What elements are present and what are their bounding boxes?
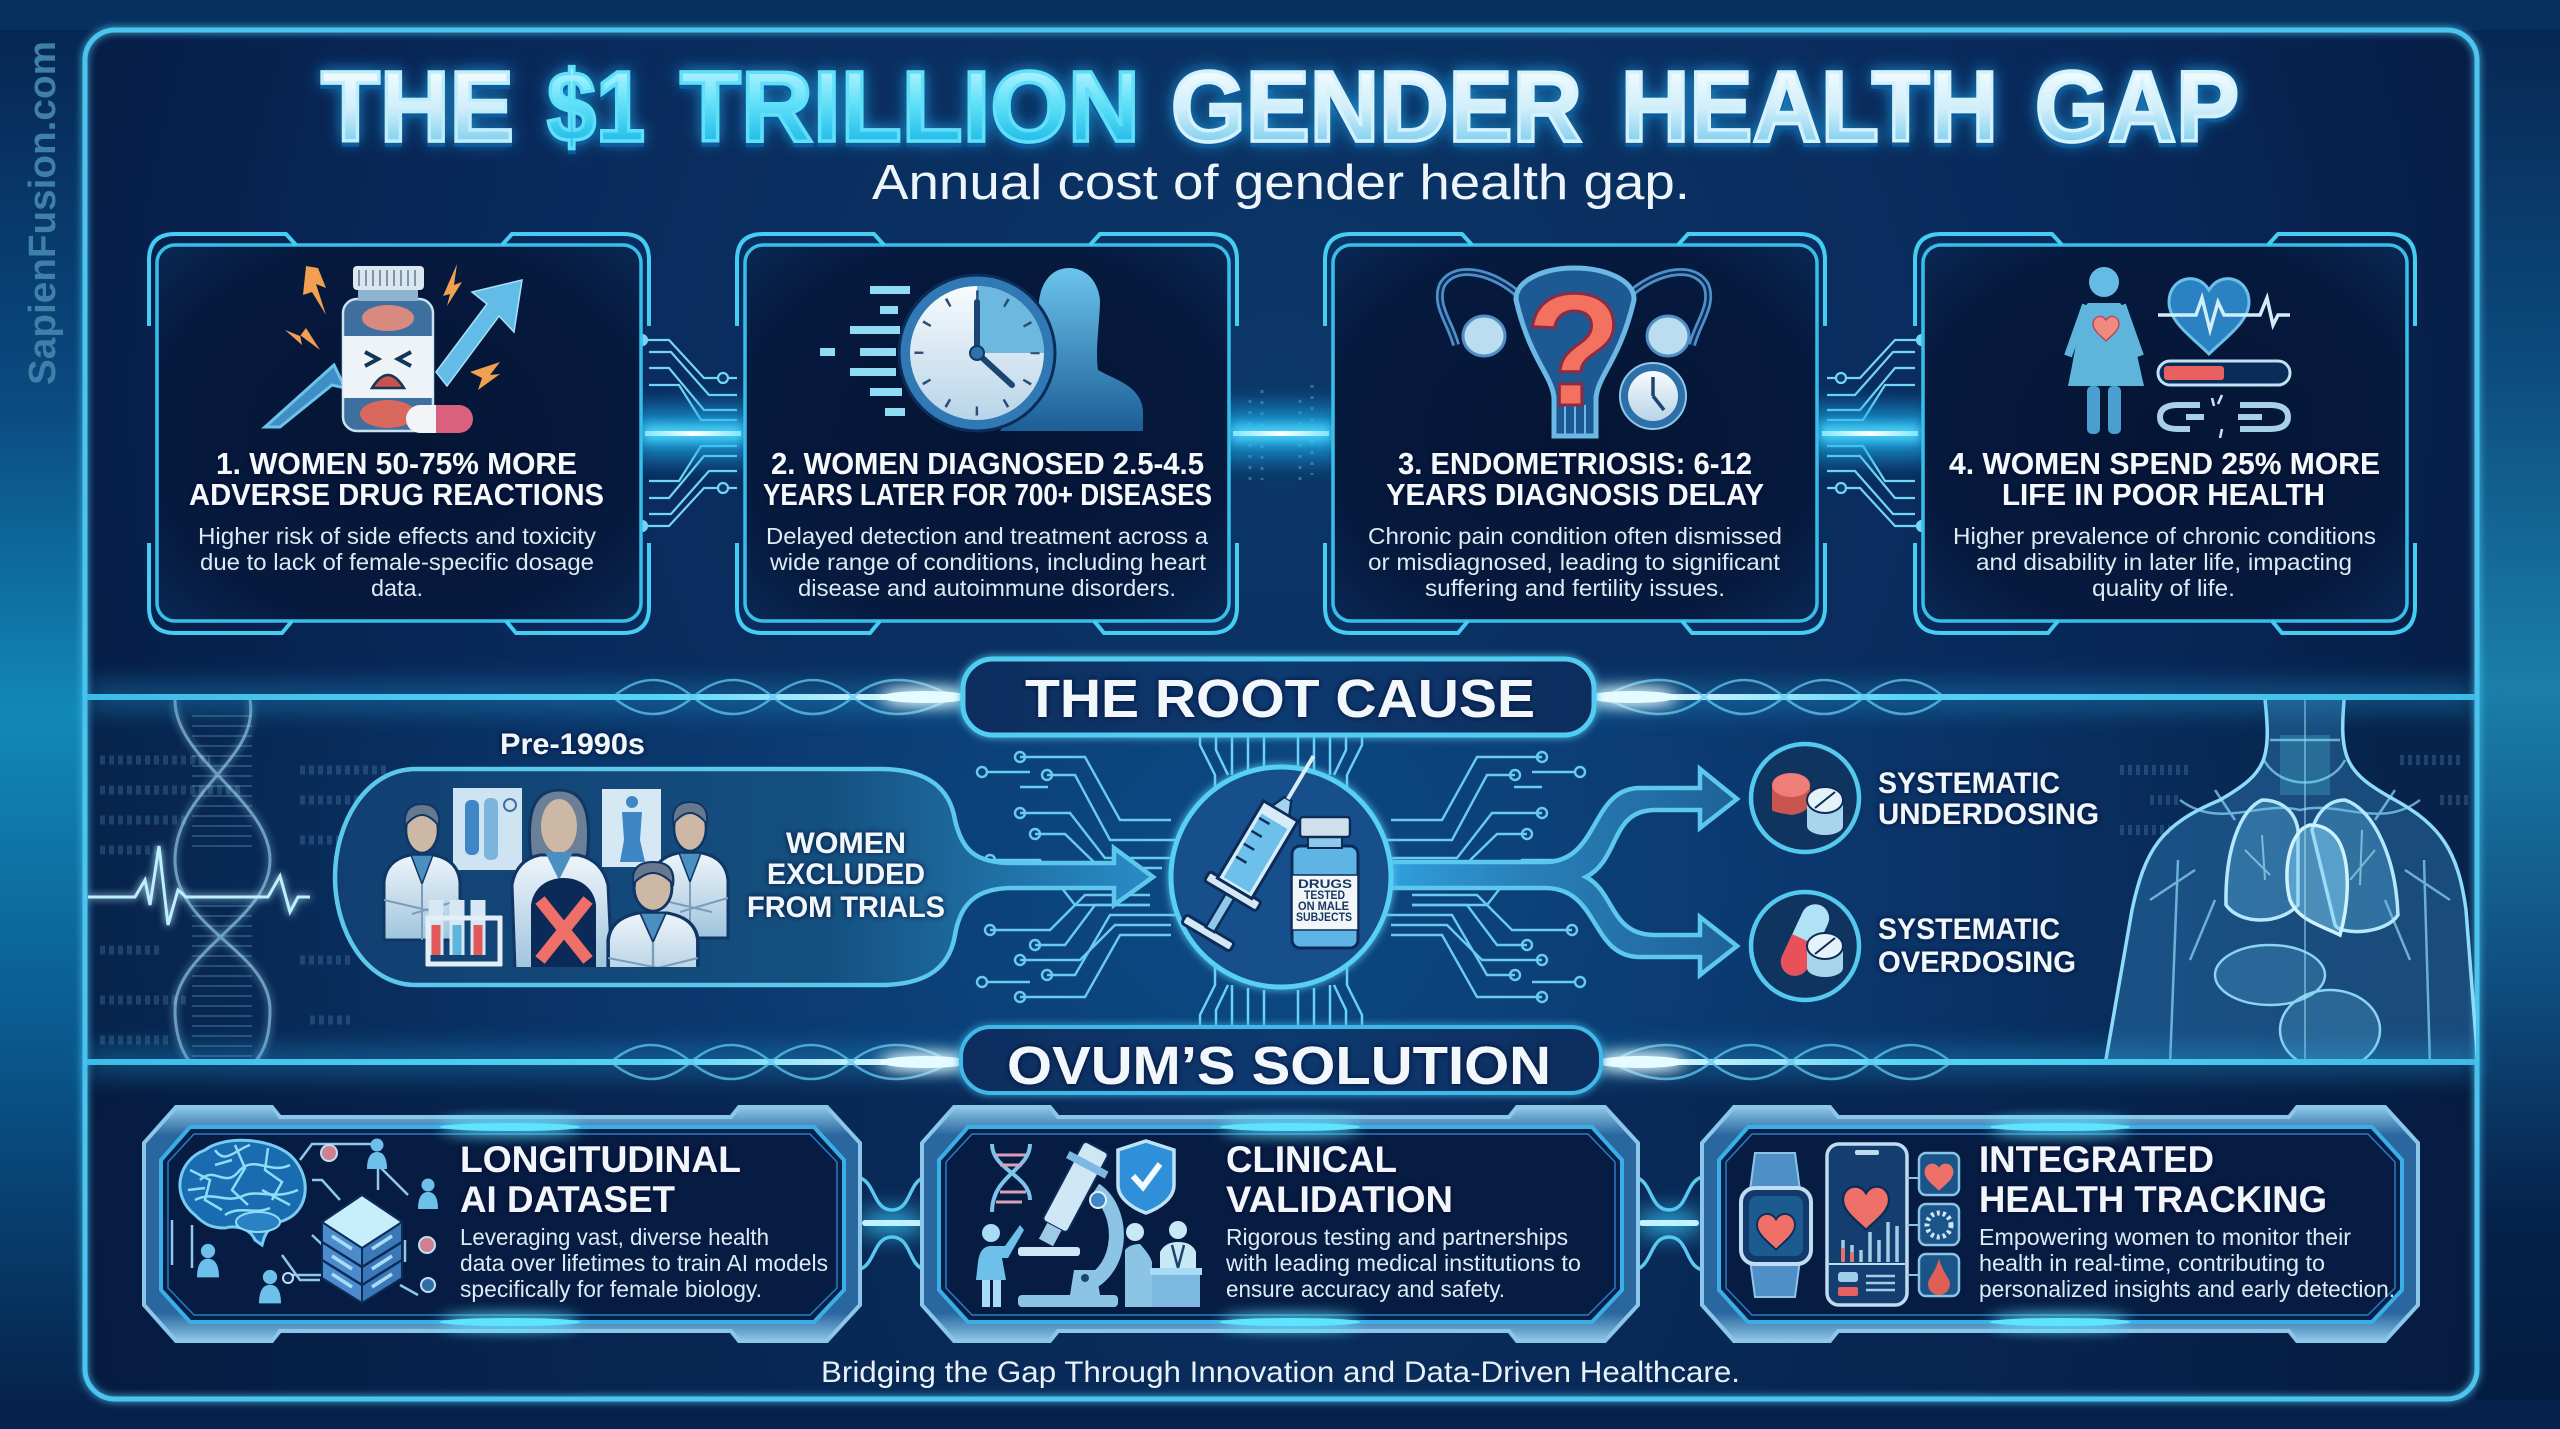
solution 2 description: ensure accuracy and safety.	[1226, 1276, 1505, 1302]
circuit traces around center	[977, 735, 1585, 1025]
card 3 description: Chronic pain condition often dismissed	[1368, 523, 1782, 549]
solution 3 description: Empowering women to monitor their	[1979, 1224, 2351, 1250]
divider: solution line	[87, 1045, 2475, 1079]
card 4 heading: LIFE IN POOR HEALTH	[2002, 477, 2325, 512]
solution 1 description: data over lifetimes to train AI models	[460, 1250, 828, 1276]
icon: tablets	[1751, 744, 1859, 852]
icon: uterus with question mark and clock	[1440, 260, 1708, 439]
panel: card 4 poor health	[1915, 234, 2415, 633]
panel: card 2 delayed diagnosis	[737, 234, 1237, 633]
underdosing text: UNDERDOSING	[1878, 798, 2099, 831]
watermark: SapienFusion.com: SapienFusion.com	[22, 41, 64, 385]
connector: cards 3 to 4	[1806, 335, 1934, 531]
icon: brain and data network	[172, 1138, 438, 1303]
icon: drug vial: SUBJECTS	[1296, 910, 1352, 924]
card 4 description	[1953, 523, 2376, 601]
label: pre-1990s: Pre-1990s	[500, 728, 645, 761]
icon: capsule and tablet	[1751, 892, 1859, 1000]
overdosing text	[1878, 913, 2076, 979]
heading: the root cause: THE ROOT CAUSE	[1025, 669, 1535, 729]
panel background: DNA helix and ECG	[88, 700, 410, 1062]
outcome: systematic overdosing	[1751, 892, 2076, 1000]
card 2 description: wide range of conditions, including heart	[769, 549, 1207, 575]
solution 2 heading	[1226, 1139, 1453, 1220]
card 2 heading: YEARS LATER FOR 700+ DISEASES	[763, 477, 1212, 512]
card 4 description: Higher prevalence of chronic conditions	[1953, 523, 2376, 549]
solution 1 heading: AI DATASET	[460, 1179, 675, 1220]
card 4 description: quality of life.	[2092, 575, 2235, 601]
title	[321, 51, 2239, 163]
overdosing text: SYSTEMATIC	[1878, 913, 2060, 946]
card 2 heading: 2. WOMEN DIAGNOSED 2.5-4.5	[771, 446, 1204, 481]
card 4 heading: 4. WOMEN SPEND 25% MORE	[1949, 446, 2380, 481]
solution 1 description: Leveraging vast, diverse health	[460, 1224, 769, 1250]
card 1 description	[198, 523, 597, 601]
panel: women excluded pill with arrow	[335, 769, 1153, 998]
solution 3 description: health in real-time, contributing to	[1979, 1250, 2325, 1276]
card 1 description: data.	[371, 575, 423, 601]
card 3 description: suffering and fertility issues.	[1425, 575, 1725, 601]
connector: cards 1 to 2	[629, 335, 757, 531]
connector: cards 2 to 3	[1217, 385, 1345, 480]
women excluded text: EXCLUDED	[767, 858, 925, 891]
card 3 description	[1368, 523, 1782, 601]
panel: clinical validation	[922, 1107, 1638, 1341]
title: HEALTH	[1621, 51, 1998, 163]
icon: clock and woman silhouette	[820, 268, 1143, 431]
title: $1	[547, 51, 645, 163]
connector: solution cards 2 to 3	[1634, 1177, 1703, 1270]
icon: drug vial: DRUGS	[1298, 877, 1352, 891]
subtitle: Annual cost of gender health gap.	[872, 156, 1690, 210]
card 3 heading: YEARS DIAGNOSIS DELAY	[1386, 477, 1764, 512]
center circle: drugs tested on male subjects	[1171, 741, 1391, 987]
panel background: translucent human torso	[2105, 690, 2478, 1070]
solution 2 description: with leading medical institutions to	[1225, 1250, 1581, 1276]
divider: root cause line	[87, 680, 2475, 714]
panel: card 1 adverse drug reactions	[149, 234, 649, 633]
footer tagline: Bridging the Gap Through Innovation and Data-Driven Healthcare.	[821, 1356, 1740, 1389]
panel: card 3 endometriosis	[1325, 234, 1825, 633]
icon: smartwatch, phone and health widgets	[1741, 1144, 1959, 1305]
card 1 description: Higher risk of side effects and toxicity	[198, 523, 597, 549]
icon: drug bottle with rising arrow	[265, 264, 522, 433]
card 1 heading	[189, 446, 604, 512]
solution 1 heading	[460, 1139, 741, 1220]
title: GAP	[2035, 51, 2239, 163]
root cause heading pill	[963, 659, 1594, 735]
women excluded text	[747, 827, 945, 924]
solution 2 heading: CLINICAL	[1226, 1139, 1397, 1180]
title: THE	[321, 51, 514, 163]
women excluded text: FROM TRIALS	[747, 891, 945, 924]
card 1 heading: 1. WOMEN 50-75% MORE	[216, 446, 577, 481]
connector: solution cards 1 to 2	[857, 1177, 926, 1270]
card 2 heading	[763, 446, 1212, 512]
solution 1 description	[460, 1224, 828, 1302]
icon: drug vial: ON MALE	[1298, 899, 1349, 913]
outcome: systematic underdosing	[1751, 744, 2099, 852]
solution 3 description	[1979, 1224, 2395, 1302]
title: GENDER	[1171, 51, 1582, 163]
solution 3 heading: HEALTH TRACKING	[1979, 1179, 2327, 1220]
icon: DNA, microscope, shield and researchers	[976, 1137, 1202, 1307]
heading: ovum's solution: OVUM’S SOLUTION	[1007, 1036, 1551, 1096]
icon: drug vial	[1292, 817, 1358, 948]
solution 3 heading: INTEGRATED	[1979, 1139, 2214, 1180]
card 3 description: or misdiagnosed, leading to significant	[1368, 549, 1781, 575]
solution 1 heading: LONGITUDINAL	[460, 1139, 741, 1180]
card 1 description: due to lack of female-specific dosage	[200, 549, 594, 575]
icon: uterus with question mark and clock: ?	[1525, 260, 1623, 439]
solution 1 description: specifically for female biology.	[460, 1276, 762, 1302]
solution 2 heading: VALIDATION	[1226, 1179, 1453, 1220]
card 3 heading: 3. ENDOMETRIOSIS: 6-12	[1398, 446, 1752, 481]
card 4 description: and disability in later life, impacting	[1976, 549, 2352, 575]
card 2 description: disease and autoimmune disorders.	[798, 575, 1176, 601]
card 4 heading	[1949, 446, 2380, 512]
card 1 heading: ADVERSE DRUG REACTIONS	[189, 477, 604, 512]
icon: drug vial: TESTED	[1304, 888, 1345, 902]
forked arrows to dosing outcomes	[1390, 769, 1737, 975]
underdosing text: SYSTEMATIC	[1878, 767, 2060, 800]
overdosing text: OVERDOSING	[1878, 946, 2076, 979]
card 2 description	[766, 523, 1208, 601]
solution heading pill	[961, 1027, 1601, 1096]
panel: integrated health tracking	[1702, 1107, 2418, 1341]
icon: syringe	[1180, 741, 1339, 953]
solution 2 description	[1225, 1224, 1581, 1302]
card 3 heading	[1386, 446, 1764, 512]
icon: doctors with excluded woman	[382, 788, 730, 967]
underdosing text	[1878, 767, 2099, 831]
panel: longitudinal AI dataset	[144, 1107, 860, 1341]
icon: woman, heart, low battery, broken chain	[2068, 267, 2290, 438]
solution 3 description: personalized insights and early detection.	[1979, 1276, 2395, 1302]
card 2 description: Delayed detection and treatment across a	[766, 523, 1208, 549]
solution 3 heading	[1979, 1139, 2327, 1220]
title: TRILLION	[680, 51, 1140, 163]
women excluded text: WOMEN	[786, 827, 906, 860]
solution 2 description: Rigorous testing and partnerships	[1226, 1224, 1568, 1250]
